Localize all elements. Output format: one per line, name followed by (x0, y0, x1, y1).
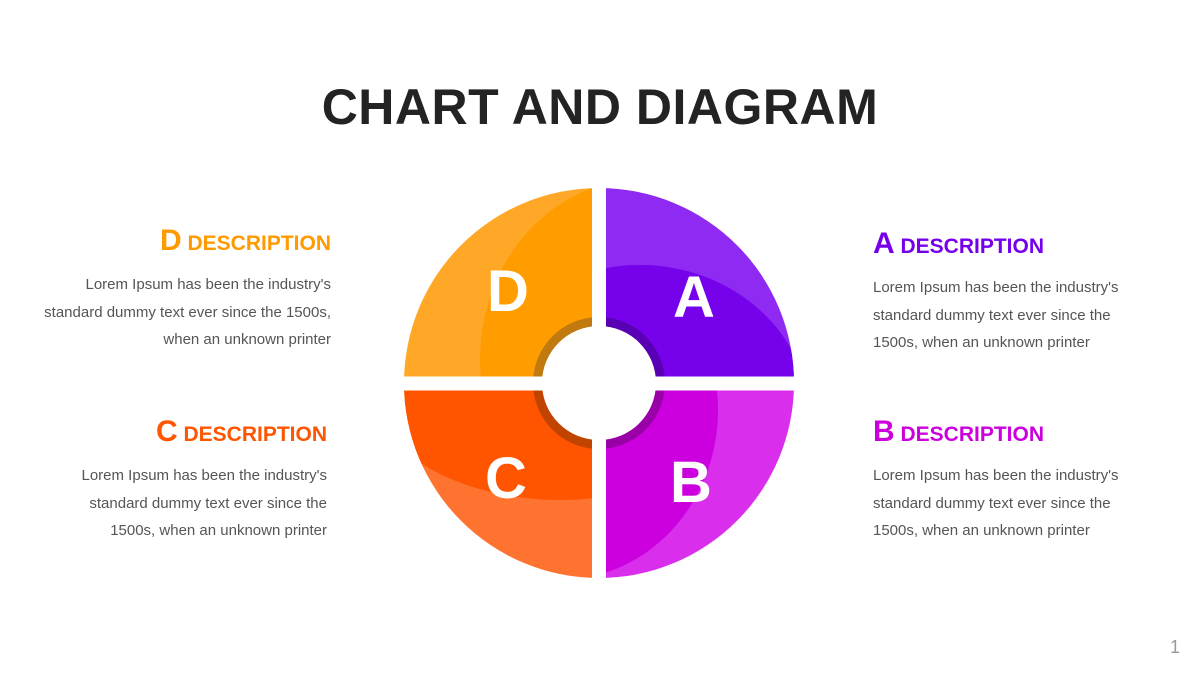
D description: Lorem Ipsum has been the industry's (86, 276, 331, 293)
A description: Lorem Ipsum has been the industry's (873, 279, 1118, 296)
diagram (404, 188, 794, 578)
C description: standard dummy text ever since the (89, 494, 327, 512)
A description (873, 227, 1118, 351)
C description (82, 415, 327, 539)
segment D (404, 188, 592, 376)
A description: 1500s, when an unknown printer (873, 334, 1090, 351)
segment B (606, 390, 794, 578)
letters (485, 259, 715, 515)
B description: B DESCRIPTION (873, 415, 1044, 448)
B description (873, 415, 1118, 539)
B description: Lorem Ipsum has been the industry's (873, 467, 1118, 484)
B description: 1500s, when an unknown printer (873, 522, 1090, 539)
B description: standard dummy text ever since the (873, 494, 1111, 512)
D description: D DESCRIPTION (160, 224, 331, 257)
A description: A DESCRIPTION (873, 227, 1044, 260)
inner ring (533, 317, 665, 449)
segment C (404, 390, 592, 578)
A description: standard dummy text ever since the (873, 306, 1111, 324)
letters: C (485, 446, 527, 511)
page number: 1 (1170, 637, 1180, 657)
C description: C DESCRIPTION (156, 415, 327, 448)
D description: when an unknown printer (163, 331, 331, 348)
segment A (606, 188, 794, 376)
C description: Lorem Ipsum has been the industry's (82, 467, 327, 484)
title: CHART AND DIAGRAM (322, 79, 878, 135)
letters: A (673, 265, 715, 330)
D description: standard dummy text ever since the 1500s, (44, 304, 331, 320)
C description: 1500s, when an unknown printer (110, 522, 327, 539)
D description (44, 224, 331, 348)
letters: B (670, 450, 712, 515)
letters: D (487, 259, 529, 324)
